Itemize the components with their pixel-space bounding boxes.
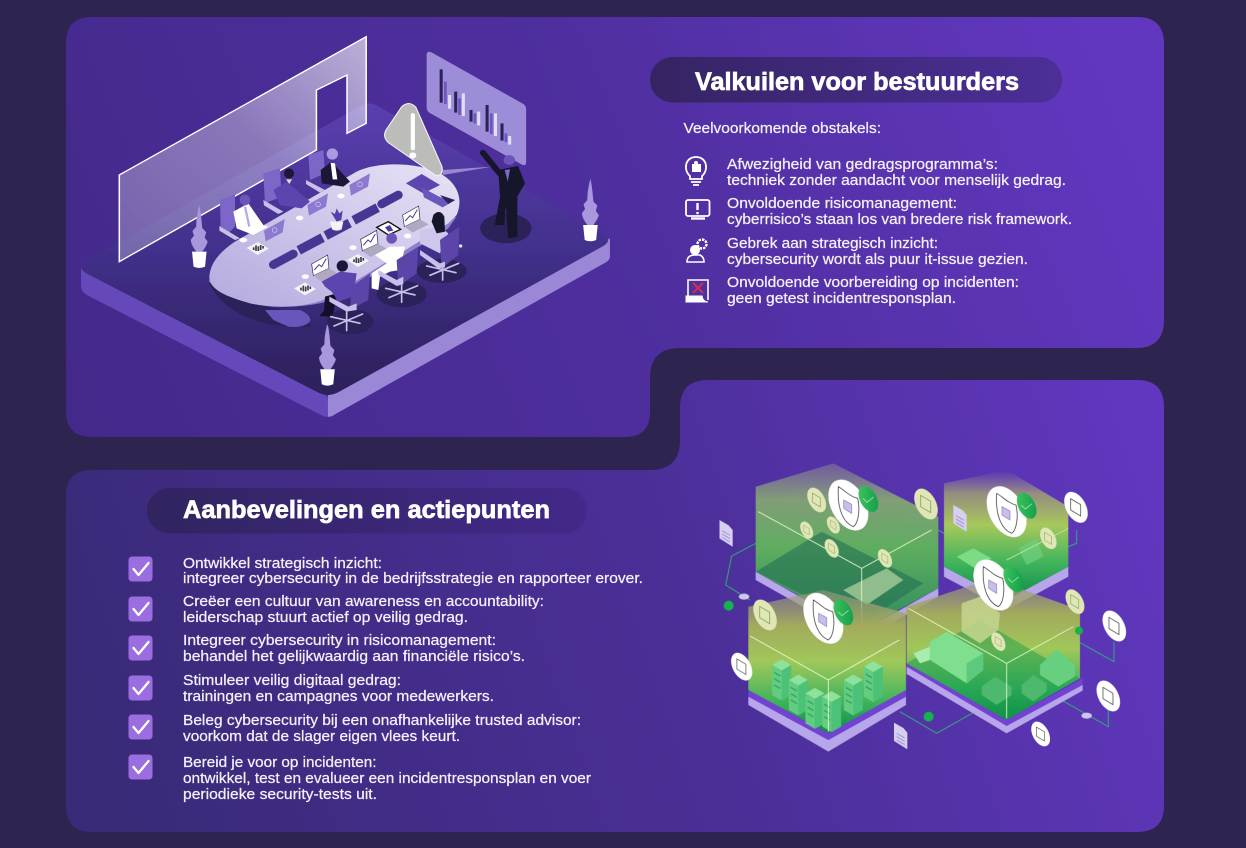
recommendation 3: Integreer cybersecurity in risicomanagement: <box>183 633 496 649</box>
icon: checkbox <box>128 556 152 582</box>
icon: light bulb <box>686 157 706 185</box>
recommendation 2: leiderschap stuurt actief op veilig gedrag. <box>183 610 468 626</box>
recommendation 5: voorkom dat de slager eigen vlees keurt. <box>183 729 460 745</box>
recommendation 1: Ontwikkel strategisch inzicht: <box>183 556 382 572</box>
heading pill: aanbevelingen: Aanbevelingen en actiepunten <box>183 496 550 524</box>
icon: checkbox <box>128 636 152 660</box>
recommendation 2 <box>128 594 544 626</box>
platform, wall, screen and plants <box>81 37 610 417</box>
recommendation 6 <box>128 754 591 803</box>
platform <box>81 104 610 417</box>
warning triangle <box>385 103 492 175</box>
cube: bottom left <box>727 586 906 752</box>
near side participants <box>294 206 467 334</box>
recommendation 6: ontwikkel, test en evalueer een incidentresponsplan en voer <box>183 771 591 787</box>
icon: document with red cross <box>686 280 708 302</box>
panel: aanbevelingen en actiepunten <box>66 380 1164 832</box>
recommendation 3 <box>128 633 525 665</box>
heading pill: valkuilen: Valkuilen voor bestuurders <box>695 68 1019 96</box>
icon: checkbox <box>128 676 152 700</box>
obstacle 4: geen getest incidentresponsplan. <box>727 291 956 307</box>
obstacle 3 <box>687 236 1028 268</box>
conference table and people <box>209 148 467 334</box>
plants <box>191 178 599 386</box>
table <box>209 164 459 327</box>
cube: bottom right <box>907 553 1131 749</box>
connector lines <box>726 530 1114 733</box>
icon: checkbox <box>128 754 152 780</box>
heading pill: aanbevelingen <box>147 488 587 534</box>
illustration: isometric boardroom <box>81 37 610 417</box>
bar chart screen <box>427 52 526 165</box>
recommendation 6: periodieke security-tests uit. <box>183 787 377 803</box>
recommendation 4: Stimuleer veilig digitaal gedrag: <box>183 673 401 689</box>
cube: top left <box>756 463 943 640</box>
icon: checkbox <box>128 714 152 740</box>
obstacle 4: Onvoldoende voorbereiding op incidenten: <box>727 275 1019 291</box>
far side participants <box>233 148 455 255</box>
heading pill: valkuilen <box>650 57 1062 102</box>
presenter <box>480 153 531 243</box>
intro text: Veelvoorkomende obstakels: <box>684 121 881 137</box>
obstacle 3: Gebrek aan strategisch inzicht: <box>727 236 938 252</box>
illustration: isometric green security cubes <box>719 463 1131 752</box>
recommendation 1: integreer cybersecurity in de bedrijfsstrategie en rapporteer erover. <box>183 571 643 587</box>
obstacle 1 <box>686 157 1066 189</box>
obstacle 1: techniek zonder aandacht voor menselijk gedrag. <box>727 173 1066 189</box>
recommendation 4: trainingen en campagnes voor medewerkers. <box>183 689 494 705</box>
recommendation 5 <box>128 713 581 745</box>
far side chairs <box>219 150 325 240</box>
obstacle 2: Onvoldoende risicomanagement: <box>727 196 957 212</box>
recommendation 1 <box>128 556 643 587</box>
obstacle 3: cybersecurity wordt als puur it-issue gezien. <box>727 252 1028 268</box>
obstacle 2: cyberrisico’s staan los van bredere risk framework. <box>727 212 1072 228</box>
glass wall <box>119 37 366 262</box>
icon: checkbox <box>128 596 152 622</box>
cube: top right <box>944 470 1093 610</box>
floating documents and green nodes <box>719 520 1092 749</box>
recommendation 3: behandel het gelijkwaardig aan financiële risico’s. <box>183 649 525 665</box>
recommendation 5: Beleg cybersecurity bij een onafhankelijke trusted advisor: <box>183 713 581 729</box>
obstacle 2 <box>686 196 1072 228</box>
icon: person with gear <box>687 240 706 262</box>
recommendation 4 <box>128 673 494 705</box>
panel: valkuilen voor bestuurders <box>66 17 1164 437</box>
icon: monitor warning <box>686 200 710 218</box>
obstacle 1: Afwezigheid van gedragsprogramma’s: <box>727 157 998 173</box>
recommendation 6: Bereid je voor op incidenten: <box>183 755 376 771</box>
recommendation 2: Creëer een cultuur van awareness en accountability: <box>183 594 544 610</box>
obstacle 4 <box>686 275 1019 307</box>
